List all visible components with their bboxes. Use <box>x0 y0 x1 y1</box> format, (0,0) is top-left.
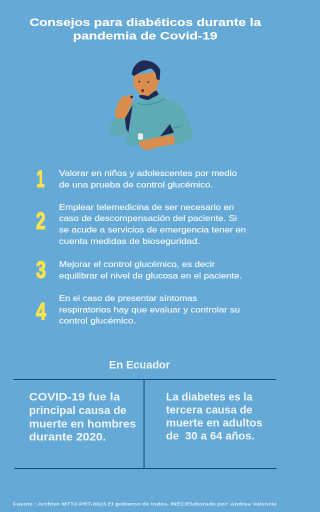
tip 2: Emplear telemedicina de ser necesario en <box>59 203 234 212</box>
tip 1: 1 <box>36 166 44 193</box>
pill <box>130 96 133 98</box>
tip 3: equilibrar el nivel de glucosa en el paciente. <box>59 271 242 280</box>
tip 3 <box>36 257 242 284</box>
fact: diabetes: de 30 a 64 años. <box>166 430 254 442</box>
fact: diabetes: tercera causa de <box>166 404 252 416</box>
illustration: man taking a pill <box>108 60 194 150</box>
title: pandemia de Covid-19 <box>73 30 218 42</box>
fact: COVID-19: principal causa de <box>29 405 126 417</box>
fact: COVID-19: muerte en hombres <box>29 418 136 430</box>
source footer: Fuente : Archivo MTT2-PRT-0023 El gobierno de todos, INEC/Elaborado por: Andrea Valencia <box>13 502 277 507</box>
fact: diabetes: muerte en adultos <box>166 417 262 429</box>
tip 3: 3 <box>36 257 46 284</box>
fact: COVID-19: COVID-19 fue la <box>29 392 121 404</box>
tip 2: cuenta medidas de bioseguridad. <box>59 237 200 246</box>
tip 4 <box>36 294 240 326</box>
collar line <box>137 99 182 128</box>
hair <box>132 60 160 80</box>
lower hand <box>139 135 175 150</box>
tip 1: Valorar en niños y adolescentes por medio <box>59 169 238 178</box>
tip 2: se acude a servicios de emergencia tener en <box>59 226 246 235</box>
tip 2: 2 <box>36 208 46 235</box>
tip 1 <box>36 166 238 193</box>
tip 4: respiratorios hay que evaluar y controlar su <box>59 305 240 314</box>
fact: COVID-19 <box>29 392 136 444</box>
title <box>30 17 262 42</box>
neck <box>139 91 159 100</box>
fact: diabetes: La diabetes es la <box>166 391 253 403</box>
sweater <box>108 93 194 145</box>
fact: diabetes <box>166 391 262 442</box>
head <box>133 72 159 96</box>
dark arm shadow <box>125 105 133 133</box>
dark sleeve shadow <box>160 124 174 136</box>
tip 4: En el caso de presentar síntomas <box>59 294 197 303</box>
raised hand <box>115 95 133 119</box>
table lines <box>14 379 276 469</box>
heading: En Ecuador: En Ecuador <box>109 360 171 372</box>
face details <box>138 81 149 92</box>
title: Consejos para diabéticos durante la <box>30 17 262 29</box>
tip 4: 4 <box>36 298 46 326</box>
tip 2: caso de descompensación del paciente. Si <box>59 214 237 223</box>
pill bottle <box>138 133 143 140</box>
tip 2 <box>36 203 246 246</box>
fact: COVID-19: durante 2020. <box>29 432 106 444</box>
tip 4: control glucémico. <box>59 317 136 326</box>
tip 3: Mejorar el control glucémico, es decir <box>59 260 215 269</box>
tip 1: de una prueba de control glucémico. <box>59 180 213 189</box>
